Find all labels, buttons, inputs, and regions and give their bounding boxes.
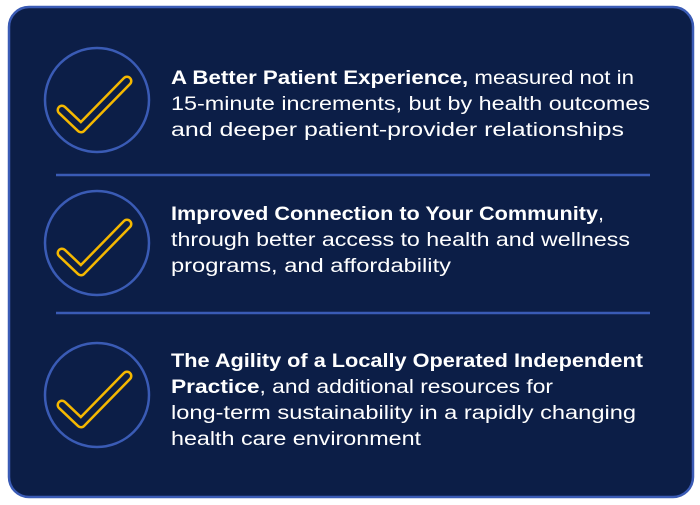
text block 2	[171, 204, 630, 277]
text block 2: programs, and affordability	[171, 256, 452, 277]
text block 3: The Agility of a Locally Operated Independent	[171, 351, 644, 372]
icon: check 2	[45, 191, 149, 295]
text block 2: through better access to health and wellness	[171, 230, 630, 251]
text block 3	[171, 351, 644, 450]
text block 1	[171, 68, 650, 141]
text block 3: Practice , and additional resources for	[171, 377, 554, 398]
text block 3: long-term sustainability in a rapidly changing	[171, 403, 636, 424]
icon: check 3	[45, 343, 149, 447]
text block 3: health care environment	[171, 429, 422, 450]
text block 2: Improved Connection to Your Community ,	[171, 204, 604, 225]
icon: check 1	[45, 48, 149, 152]
text block 1: A Better Patient Experience, measured not in	[171, 68, 634, 89]
text block 1: 15-minute increments, but by health outcomes	[171, 94, 650, 115]
text block 1: and deeper patient-provider relationships	[171, 120, 624, 141]
